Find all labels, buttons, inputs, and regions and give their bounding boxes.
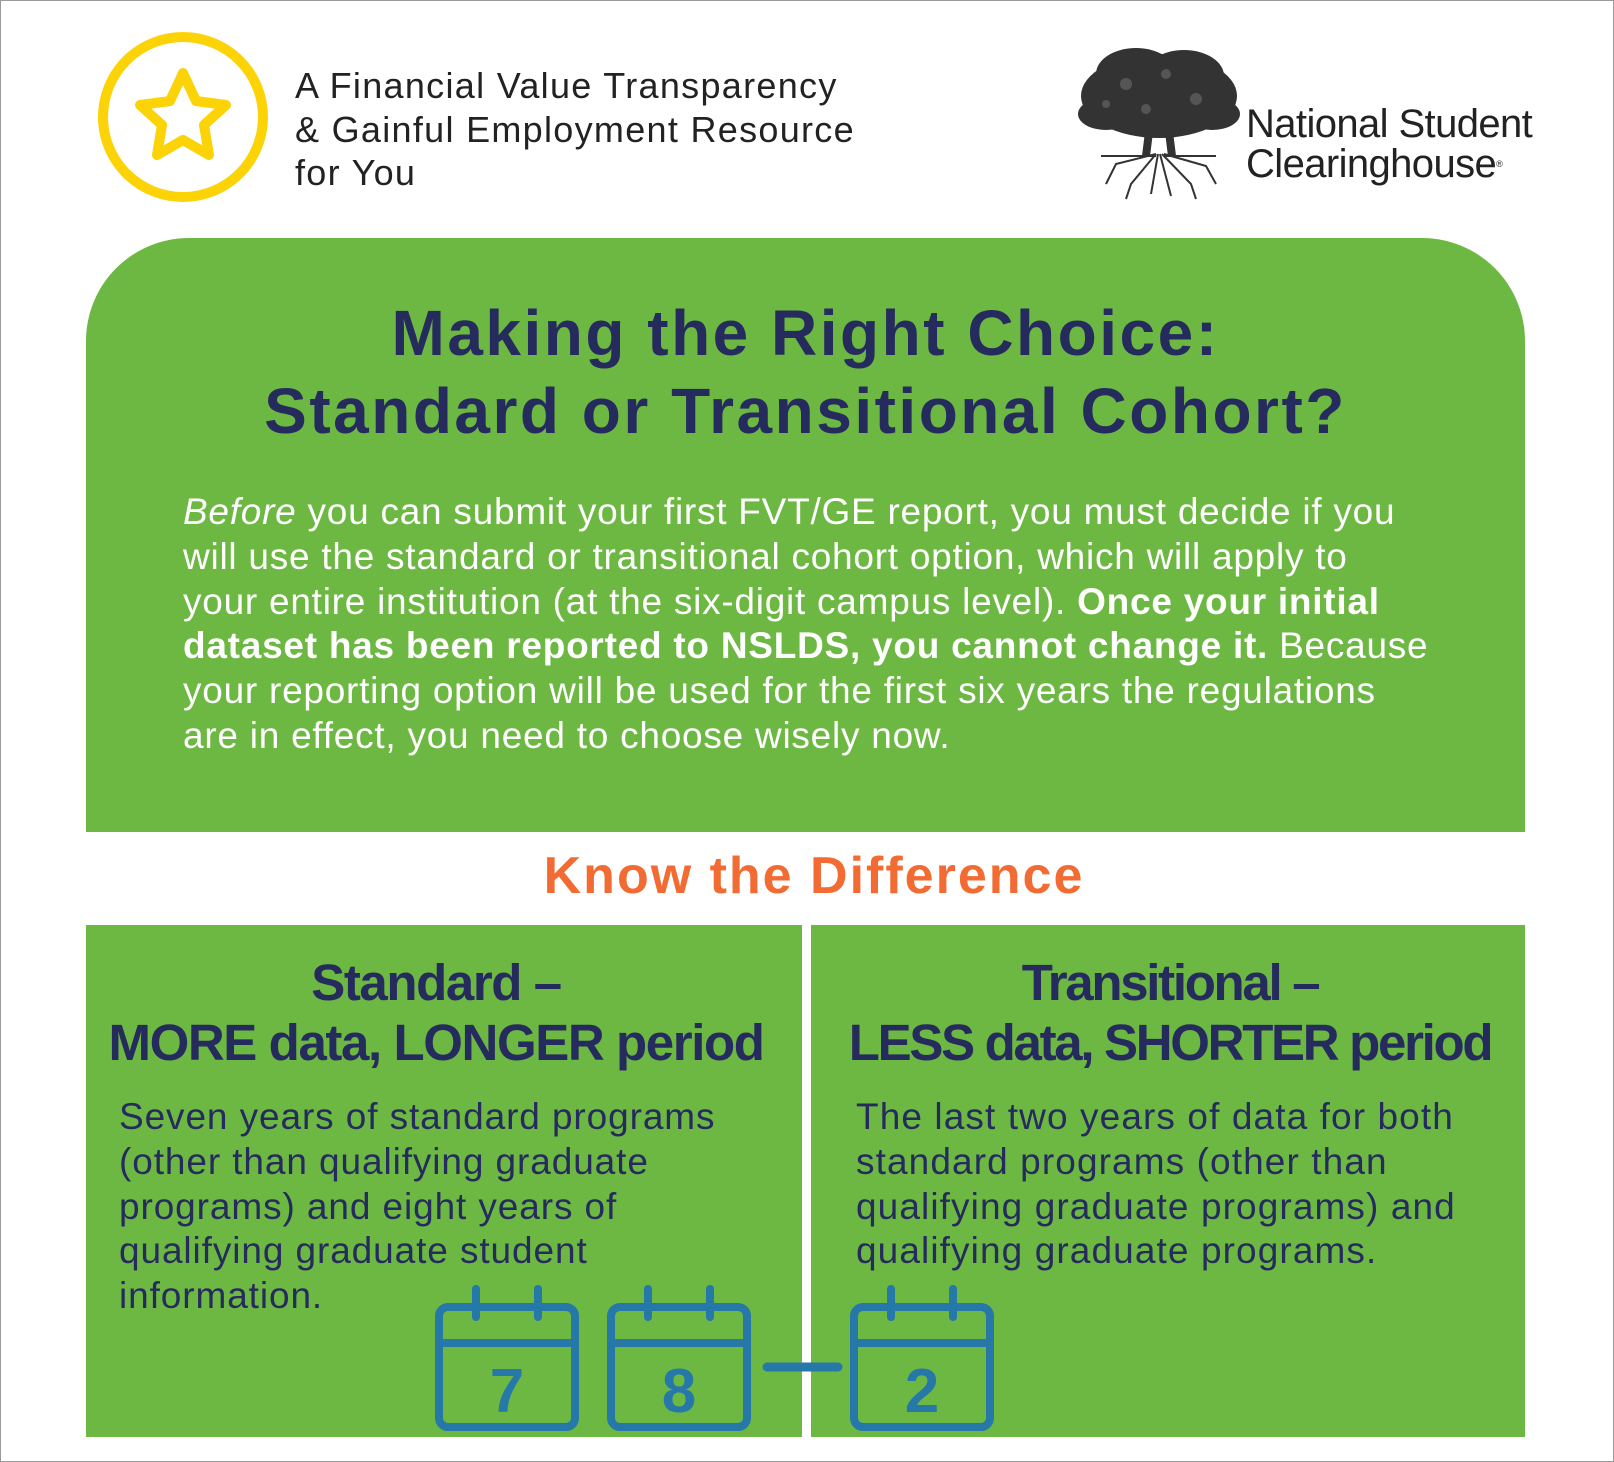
intro paragraph: are in effect, you need to choose wisely now.	[183, 715, 950, 756]
title: Standard or Transitional Cohort?	[264, 375, 1347, 447]
transitional text: The last two years of data for both	[856, 1096, 1454, 1137]
intro paragraph: Before you can submit your first FVT/GE report, you must decide if you	[183, 491, 1395, 532]
logo text: Clearinghouse®	[1246, 142, 1502, 186]
standard heading: Standard –	[311, 954, 561, 1011]
logo text: National Student	[1246, 102, 1532, 146]
intro paragraph: your reporting option will be used for the first six years the regulations	[183, 670, 1376, 711]
standard text: information.	[119, 1275, 323, 1316]
standard heading: MORE data, LONGER period	[109, 1014, 763, 1071]
logo text	[1246, 102, 1532, 186]
standard text: (other than qualifying graduate	[119, 1141, 649, 1182]
icon: calendars 7, 8 – 2	[435, 1285, 994, 1431]
transitional heading: Transitional –	[1022, 954, 1318, 1011]
intro paragraph: will use the standard or transitional cohort option, which will apply to	[183, 536, 1348, 577]
panel: standard	[86, 925, 802, 1437]
header text	[295, 65, 855, 193]
icon: calendars 7, 8 – 2: 7	[490, 1357, 524, 1426]
transitional text: qualifying graduate programs.	[856, 1230, 1377, 1271]
transitional text	[856, 1096, 1456, 1271]
logo: National Student Clearinghouse	[1078, 48, 1532, 200]
standard text: programs) and eight years of	[119, 1186, 617, 1227]
intro paragraph: dataset has been reported to NSLDS, you cannot change it. Because	[183, 625, 1428, 666]
panel: intro	[86, 238, 1525, 832]
header text: & Gainful Employment Resource	[295, 108, 855, 150]
standard heading	[109, 954, 763, 1071]
icon: calendars 7, 8 – 2: 2	[905, 1357, 939, 1426]
icon: tree	[1078, 48, 1240, 200]
transitional heading	[849, 954, 1491, 1071]
transitional text: standard programs (other than	[856, 1141, 1388, 1182]
transitional heading: LESS data, SHORTER period	[849, 1014, 1491, 1071]
standard text	[119, 1096, 715, 1316]
header text: A Financial Value Transparency	[295, 65, 838, 106]
panel: transitional	[811, 925, 1525, 1437]
title	[264, 297, 1347, 447]
transitional text: qualifying graduate programs) and	[856, 1186, 1456, 1227]
header text: for You	[295, 152, 416, 193]
intro paragraph: your entire institution (at the six-digit campus level). Once your initial	[183, 581, 1380, 622]
heading: Know the Difference: Know the Difference	[544, 847, 1084, 905]
title: Making the Right Choice:	[392, 297, 1220, 369]
icon: star circle	[98, 32, 268, 202]
intro paragraph	[183, 491, 1428, 756]
standard text: Seven years of standard programs	[119, 1096, 715, 1137]
icon: calendars 7, 8 – 2: 8	[662, 1357, 696, 1426]
standard text: qualifying graduate student	[119, 1230, 588, 1271]
